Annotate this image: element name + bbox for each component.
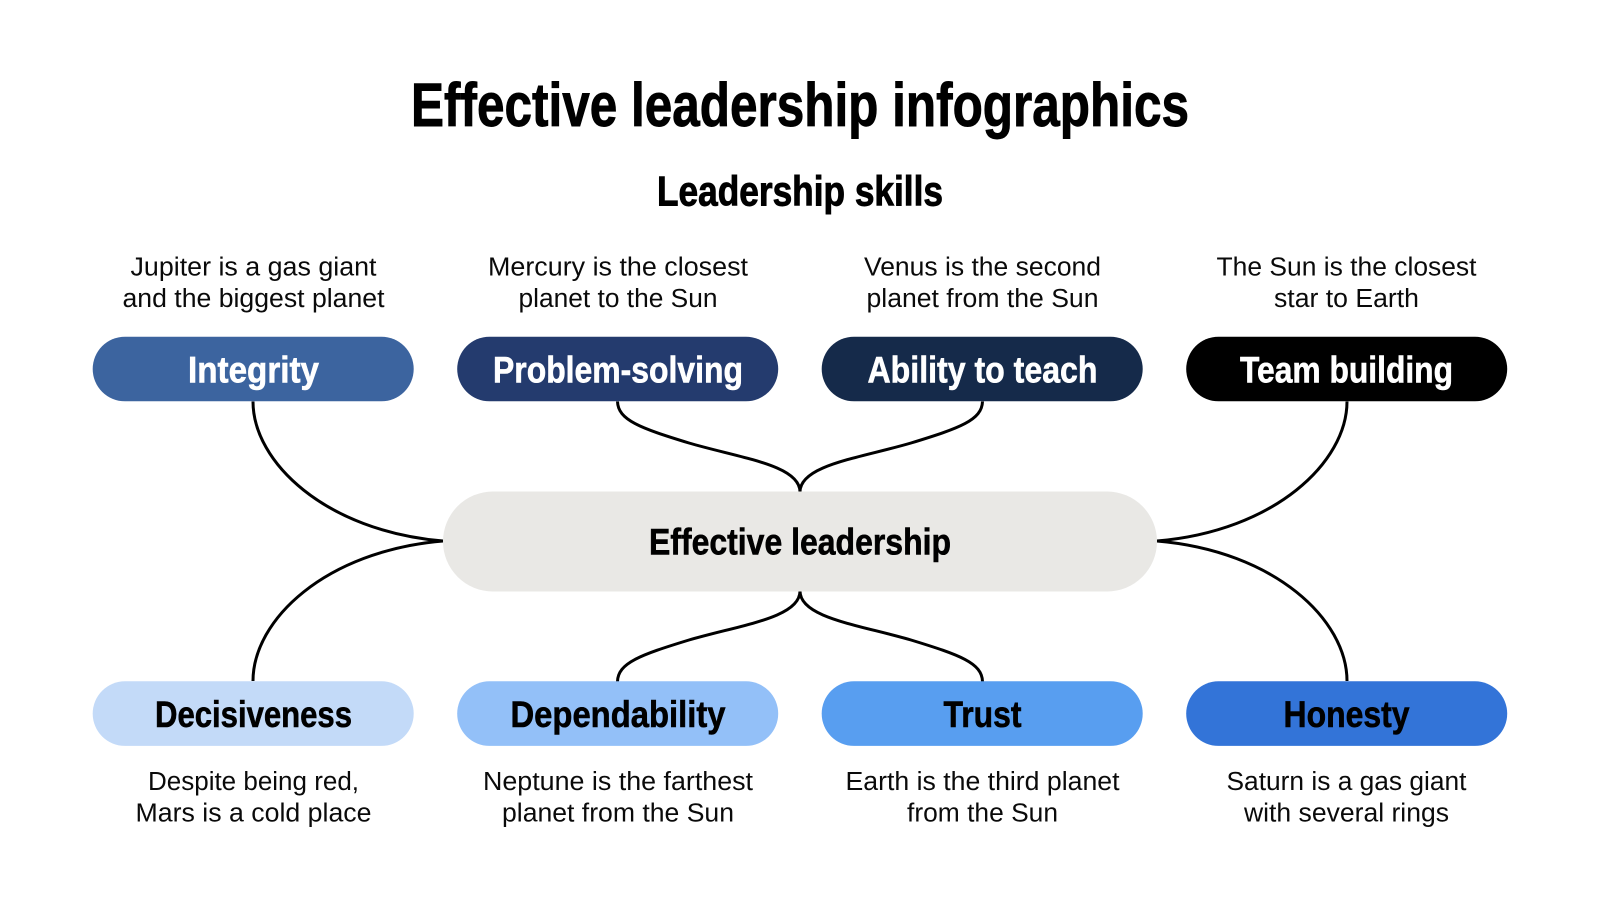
panel: Ability to teach: Ability to teach: [868, 348, 1098, 390]
panel: Team building: star to Earth: [1274, 285, 1419, 313]
panel: Trust: from the Sun: [907, 800, 1058, 828]
panel: Integrity: Jupiter is a gas giant: [130, 254, 376, 282]
panel: Problem-solving: [457, 254, 778, 401]
panel: Decisiveness: [93, 681, 414, 828]
panel: Team building: Team building: [1240, 348, 1453, 390]
panel: Integrity: [93, 254, 414, 401]
panel: Decisiveness: Decisiveness: [155, 693, 352, 735]
central node: Effective leadership: Effective leadership: [649, 520, 951, 562]
panel: Ability to teach: planet from the Sun: [866, 285, 1098, 313]
panel: Integrity: and the biggest planet: [122, 285, 384, 313]
panel: Trust: [822, 681, 1143, 828]
panel: Honesty: [1186, 681, 1507, 828]
panel: Honesty: Honesty: [1284, 693, 1410, 735]
connectors: [253, 402, 1347, 682]
panel: Team building: The Sun is the closest: [1216, 254, 1476, 282]
subtitle: Leadership skills: [657, 168, 943, 214]
panel: Ability to teach: [822, 254, 1143, 401]
central node: Effective leadership: [443, 492, 1157, 592]
panel: Dependability: Neptune is the farthest: [483, 768, 753, 796]
panel: Trust: Earth is the third planet: [846, 768, 1120, 796]
panel: Dependability: [457, 681, 778, 828]
panel: Team building: [1186, 254, 1507, 401]
panel: Honesty: with several rings: [1243, 800, 1449, 828]
panel: Trust: Trust: [944, 693, 1022, 735]
panel: Honesty: Saturn is a gas giant: [1226, 768, 1466, 796]
panel: Problem-solving: planet to the Sun: [518, 285, 718, 313]
panel: Ability to teach: Venus is the second: [864, 254, 1101, 282]
panel: Decisiveness: Mars is a cold place: [136, 800, 372, 828]
panel: Integrity: Integrity: [188, 348, 319, 390]
panel: Dependability: Dependability: [510, 693, 726, 735]
panel: Problem-solving: Problem-solving: [493, 348, 743, 390]
title: Effective leadership infographics: [411, 71, 1189, 139]
panel: Decisiveness: Despite being red,: [148, 768, 359, 796]
panel: Problem-solving: Mercury is the closest: [488, 254, 748, 282]
panel: Dependability: planet from the Sun: [502, 800, 734, 828]
